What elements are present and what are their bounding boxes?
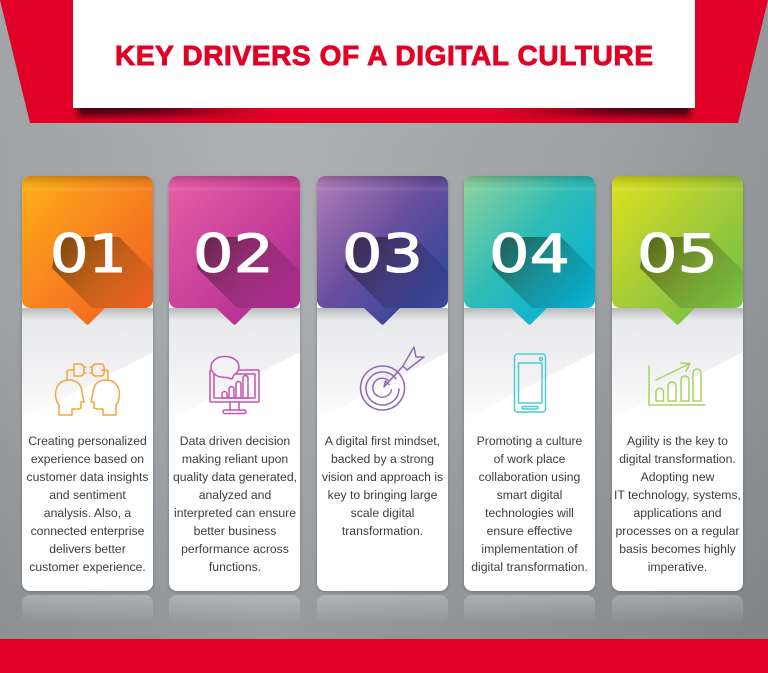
reflection [169, 595, 300, 623]
banner shadow [78, 103, 690, 116]
text block [471, 434, 588, 574]
text block: digital transformation. [619, 452, 736, 466]
text block: interpreted can ensure [174, 506, 296, 520]
text block: vision and approach is [322, 470, 443, 484]
icon: target and arrow [360, 347, 424, 410]
number tab [464, 176, 595, 325]
text block: of work place [494, 452, 566, 466]
number: 03 [342, 224, 423, 285]
reflection [612, 595, 743, 623]
number: 01 [50, 224, 127, 285]
text block: Promoting a culture [477, 434, 583, 448]
text block: scale digital [351, 506, 414, 520]
text block: better business [194, 524, 276, 538]
footer bar [0, 639, 768, 673]
text block: A digital first mindset, [325, 434, 440, 448]
text block: implementation of [481, 542, 578, 556]
text block: Creating personalized [28, 434, 147, 448]
text block: key to bringing large [328, 488, 438, 502]
panel: card 05 [612, 176, 743, 623]
text block: basis becomes highly [619, 542, 737, 556]
text block [322, 434, 443, 538]
reflection [464, 595, 595, 623]
card body [612, 176, 743, 592]
card body [169, 176, 300, 592]
text block: experience based on [31, 452, 144, 466]
text block [614, 434, 741, 574]
icon: monitor and speech bubble [210, 356, 259, 414]
number: 04 [489, 224, 570, 285]
text block: technologies will [485, 506, 574, 520]
icon: smartphone [514, 354, 546, 412]
reflection [317, 595, 448, 623]
text block [173, 434, 297, 574]
card body [317, 176, 448, 592]
text block: customer data insights [27, 470, 148, 484]
icon: growth chart [649, 363, 705, 405]
card body [22, 176, 153, 592]
text block: backed by a strong [331, 452, 434, 466]
text block: digital transformation. [471, 560, 588, 574]
panel: card 03 [317, 176, 448, 623]
number tab [612, 176, 743, 325]
header banner [0, 0, 768, 123]
text block: Adopting new [641, 470, 715, 484]
text block: smart digital [497, 488, 562, 502]
text block: analyzed and [199, 488, 271, 502]
text block: quality data generated, [173, 470, 297, 484]
panel: card 04 [464, 176, 595, 623]
title: KEY DRIVERS OF A DIGITAL CULTURE [115, 40, 653, 71]
number tab [317, 176, 448, 325]
text block: making reliant upon [182, 452, 288, 466]
number tab [22, 176, 153, 325]
text block: imperative. [648, 560, 707, 574]
card body [464, 176, 595, 592]
number: 02 [193, 224, 274, 285]
text block: delivers better [49, 542, 126, 556]
text block: analysis. Also, a [44, 506, 131, 520]
text block: and sentiment [49, 488, 126, 502]
text block: customer experience. [29, 560, 146, 574]
text block: Data driven decision [180, 434, 290, 448]
text block: applications and [633, 506, 722, 520]
text block: connected enterprise [31, 524, 145, 538]
text block: functions. [209, 560, 261, 574]
text block: collaboration using [479, 470, 580, 484]
number tab [169, 176, 300, 325]
text block: processes on a regular [616, 524, 739, 538]
text block: IT technology, systems, [614, 488, 741, 502]
red trapezoid [0, 0, 768, 123]
white title panel [73, 0, 695, 108]
icon: plug and heads [56, 364, 119, 415]
text block: ensure effective [487, 524, 573, 538]
number: 05 [637, 224, 718, 285]
text block: Agility is the key to [627, 434, 728, 448]
text block: performance across [181, 542, 289, 556]
panel: card 01 [22, 176, 153, 623]
reflection [22, 595, 153, 623]
panel: card 02 [169, 176, 300, 623]
text block [27, 434, 148, 574]
text block: transformation. [342, 524, 423, 538]
